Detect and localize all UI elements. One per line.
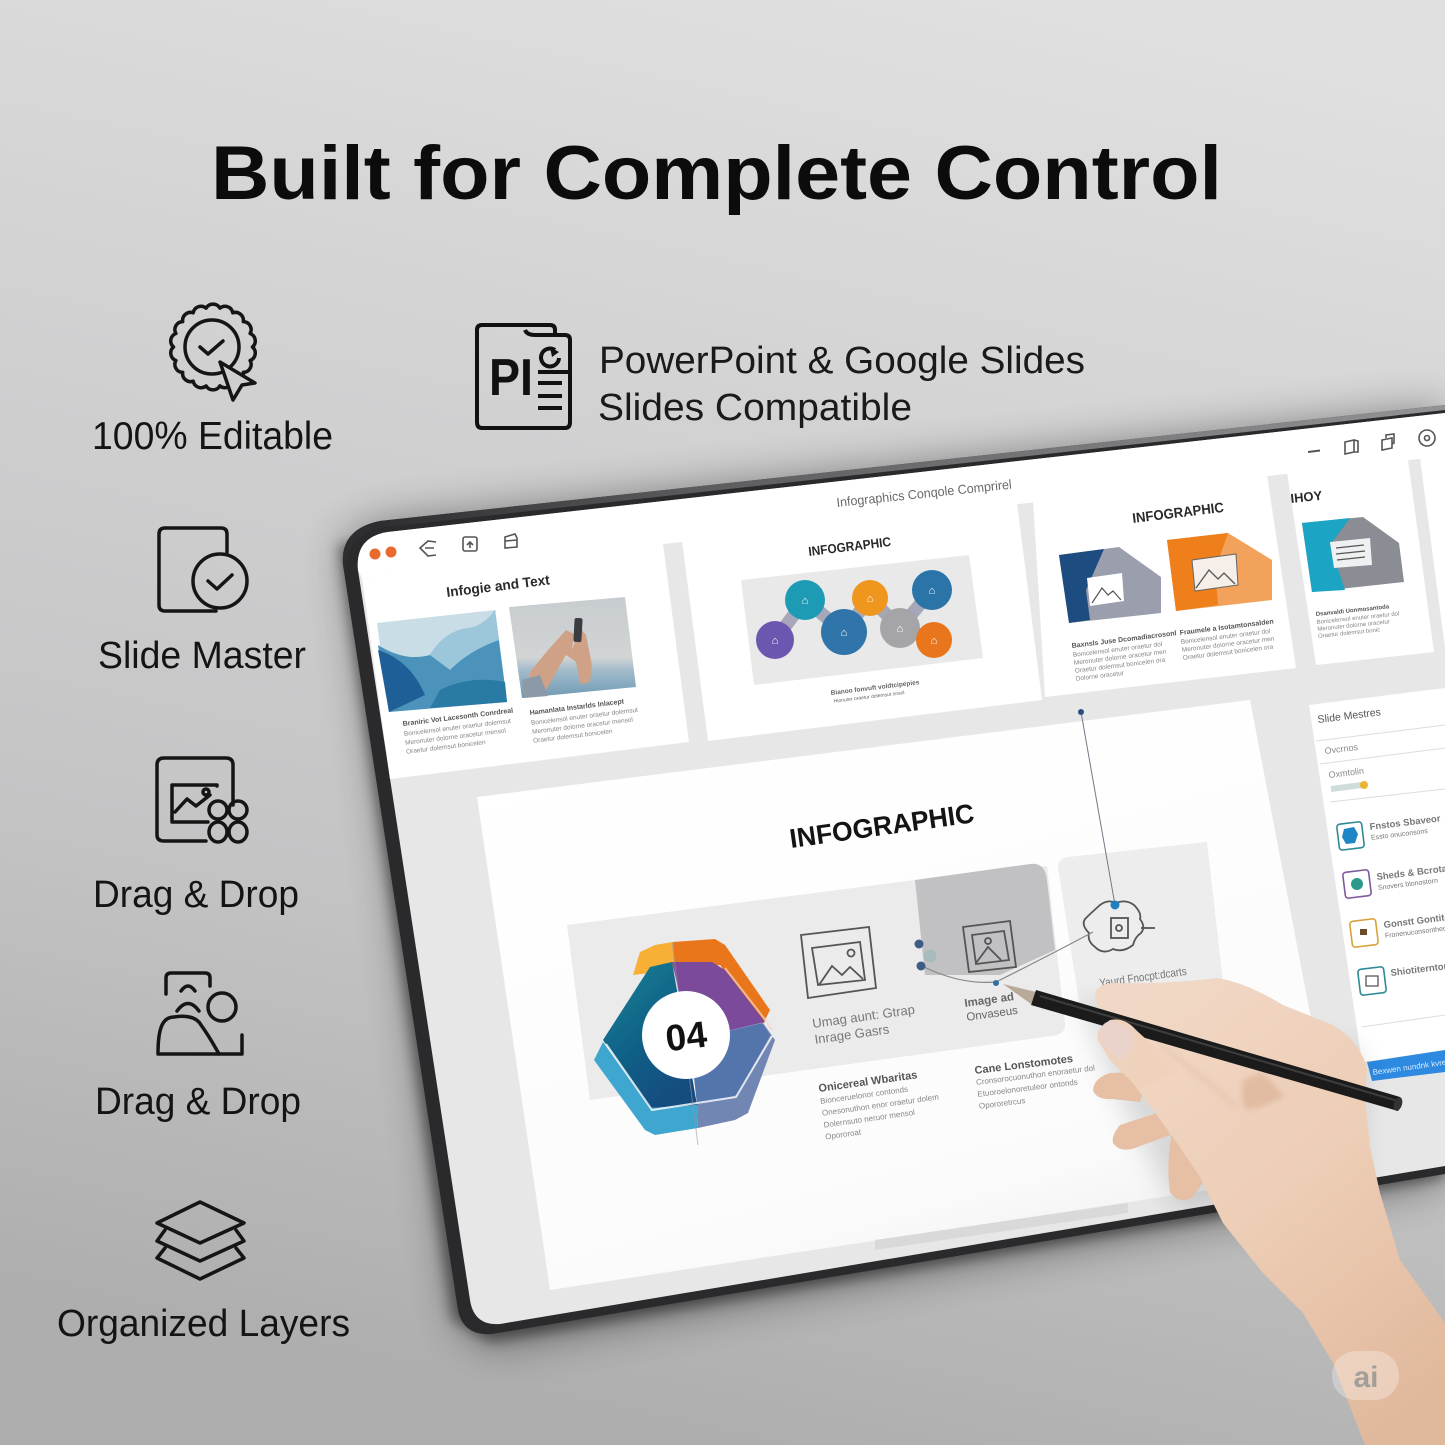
item 2 (1343, 863, 1445, 898)
text block 2 (974, 1050, 1098, 1111)
captions: Braniric Vot Lacesonth Conrdreal (402, 707, 514, 728)
number circle (642, 991, 730, 1079)
image icon 1 (801, 927, 876, 998)
connectors (775, 590, 934, 640)
window controls (1308, 430, 1435, 454)
tablet contact shadow (338, 540, 1445, 1342)
palm crease (1242, 1072, 1285, 1110)
circles: ⌂ (772, 635, 778, 647)
slide 4: partial (1287, 460, 1434, 665)
watermark: ai badge: ai (1353, 1361, 1379, 1394)
icon: picture with flower (157, 758, 247, 842)
blue image shape (1059, 547, 1161, 623)
captions: Fraumele a Isotamtonsalden (1179, 619, 1274, 637)
item 3 (1350, 911, 1445, 947)
captions: Oraetur dolemsut bonicelen ora (1074, 657, 1166, 675)
captions: Bonicelensol enuter oraetur dolemsut (404, 718, 512, 738)
hexagon graphic (594, 939, 775, 1145)
feature: PowerPoint & Google Slides (477, 325, 1085, 429)
captions: Oraetur dolemsut bonicelen ora (1182, 644, 1274, 662)
pen (1003, 984, 1404, 1112)
feature: Drag & Drop image (93, 758, 299, 916)
number: 04 (663, 1014, 710, 1059)
item 2: Snovers blonostorn (1378, 878, 1438, 892)
hand with pen (1003, 978, 1445, 1445)
captions: Oraetur dolemsut bonicelen (406, 739, 486, 756)
text block 1: Onesonuthon enor oraetur dolem (821, 1092, 940, 1118)
slide heading: Infogie and Text (445, 571, 551, 600)
label: 100% Editable (92, 415, 333, 458)
image caption 2: Image ad (964, 991, 1015, 1010)
caption: Meronuter dolorne oracetur (1317, 619, 1390, 633)
right card (1058, 842, 1224, 1020)
back fingers (1093, 1072, 1212, 1200)
captions: Bonicelensol enuter oraetur dolemsut (531, 707, 639, 727)
label: Drag & Drop (93, 874, 299, 916)
item 1 (1337, 813, 1443, 850)
frame rim (343, 405, 1445, 575)
caption: Dsanvaldi Uonmosantoda (1316, 604, 1390, 618)
palm and index (1095, 978, 1445, 1445)
slide heading: IHOY (1290, 488, 1323, 506)
feature: Slide Master (98, 528, 306, 677)
captions: Meronuter dolorne oracetur mensol (405, 727, 507, 747)
circles: ⌂ (929, 585, 935, 597)
toolbar and slide strip (358, 413, 1445, 578)
text block 1: Dolernsuto neruor mensol (823, 1108, 916, 1130)
item 1: Fnstos Sbaveor (1369, 813, 1441, 833)
text block 2: Etuoroelonoretuleor ontonds (977, 1078, 1078, 1099)
feature: Organized Layers (57, 1202, 350, 1345)
orange image shape (1167, 533, 1272, 611)
slide 3: image shapes (1033, 475, 1296, 697)
window title: Infographics Conqole Comprirel (836, 477, 1012, 510)
image caption 1: Inrage Gasrs (814, 1021, 891, 1047)
scrollbar (875, 1203, 1128, 1250)
photo: wave (377, 610, 507, 712)
selection lines (914, 709, 1120, 986)
icon: layers (157, 1202, 244, 1279)
caption: Oraetur dolemsut bonic (1318, 627, 1381, 640)
label: Organized Layers (57, 1303, 350, 1345)
photo: hands with phone (509, 597, 636, 698)
circles: ⌂ (802, 595, 808, 607)
captions (402, 697, 641, 756)
circles (756, 570, 952, 659)
watermark: ai badge (1332, 1351, 1399, 1400)
text block 2: Cronsorocuonuthon enoraetur dol (975, 1063, 1096, 1087)
caption (830, 679, 921, 705)
text block 2: Cane Lonstomotes (974, 1053, 1074, 1077)
image icon 2 (963, 921, 1016, 972)
circles: ⌂ (841, 627, 847, 639)
tablet frame (343, 405, 1445, 1334)
finger gap (1160, 1045, 1238, 1108)
blue button (1367, 1050, 1445, 1081)
captions: Bonicelensol enuter oraetur dol (1072, 641, 1163, 659)
card icon (1330, 538, 1372, 568)
captions: Baxnsls Juse Dcomadiacrosonl (1071, 630, 1177, 650)
thumb (1098, 1019, 1180, 1090)
item 4 (1358, 960, 1445, 995)
image caption 1: Umag aunt: Gtrap (811, 1002, 916, 1031)
toolbar icons (420, 534, 517, 556)
slide 2: circle infographic (682, 503, 1042, 741)
screen (358, 413, 1445, 1324)
image caption 1 (811, 1002, 918, 1047)
image caption 2 (964, 991, 1019, 1024)
gray band (567, 866, 1065, 1100)
captions: Meronuter dolorne oracetur mensol (532, 716, 634, 736)
main slide (477, 700, 1340, 1290)
feature: 100% Editable (92, 304, 333, 458)
caption: Bonicelensol enuter oraetur dol (1316, 611, 1400, 626)
circles: ⌂ (897, 623, 903, 635)
caption: Hionuter oraetur dolemsut onsol (833, 690, 905, 705)
icon: PPT file: PI (489, 349, 533, 407)
window dots (370, 546, 396, 560)
rows (1316, 725, 1445, 1027)
icon: badge with cursor (171, 304, 255, 400)
icon: person and placeholder (158, 973, 242, 1054)
label: Drag & Drop (95, 1081, 301, 1123)
slide 5: sliver (1420, 455, 1445, 648)
icon: slide with check (159, 528, 247, 611)
tablet shadow (345, 410, 1445, 1345)
dark selected block (915, 864, 1055, 975)
captions: Bonicelensol enuter oraetur dol (1180, 628, 1271, 646)
hand shadow (1080, 1000, 1360, 1210)
circles: ⌂ (867, 593, 873, 605)
text: Slides Compatible (598, 387, 912, 429)
options: Ovcrnos (1324, 742, 1359, 756)
slide heading: INFOGRAPHIC (808, 534, 892, 559)
item 1: Essto onuconsons (1371, 828, 1429, 842)
captions: Oraetur dolemsut bonicelen (533, 728, 613, 745)
captions (1071, 619, 1277, 683)
text block 1: Opororoat (825, 1127, 862, 1142)
panel heading: Slide Mestres (1317, 706, 1382, 726)
text block 1: Bionceruelonor contonds (820, 1085, 909, 1106)
slide 1: image and text (362, 544, 689, 779)
caption: Bianoo fonvuft voldtcipepies (830, 679, 920, 697)
card caption: Yaurd Fnocpt:dcarts (1099, 966, 1188, 990)
arrow shape (1302, 517, 1404, 592)
captions: Meronuter dolorne oracetur men (1181, 636, 1275, 654)
thumb nail (1099, 1021, 1134, 1060)
text: PowerPoint & Google Slides (599, 340, 1085, 382)
caption (1316, 603, 1401, 640)
icon: PPT file (477, 325, 570, 428)
title: Built for Complete Control (211, 131, 1222, 216)
text (598, 340, 1085, 429)
text block 1: Onicereal Wbaritas (818, 1069, 918, 1095)
gray panel (741, 555, 983, 685)
feature: Drag & Drop person (95, 973, 301, 1123)
right panel: slide masters: Oxmtolin (1328, 766, 1364, 780)
captions: Dolorne oracetur (1075, 670, 1125, 683)
slide heading: INFOGRAPHIC (1131, 499, 1225, 526)
captions: Hamanlata Instarlds Inlacept (529, 698, 625, 717)
image caption 2: Onvaseus (966, 1005, 1019, 1024)
cloud icon (1084, 901, 1155, 952)
circles: ⌂ (931, 635, 937, 647)
label: Slide Master (98, 635, 306, 677)
text block 1 (818, 1067, 943, 1142)
slide heading: INFOGRAPHIC (788, 798, 976, 854)
slider (1331, 781, 1368, 789)
captions: Meronuter dolorne oracetur men (1073, 649, 1167, 667)
tablet mockup (343, 405, 1445, 1334)
text block 2: Opororetrcus (978, 1096, 1026, 1111)
right panel: slide masters (1309, 688, 1445, 1081)
